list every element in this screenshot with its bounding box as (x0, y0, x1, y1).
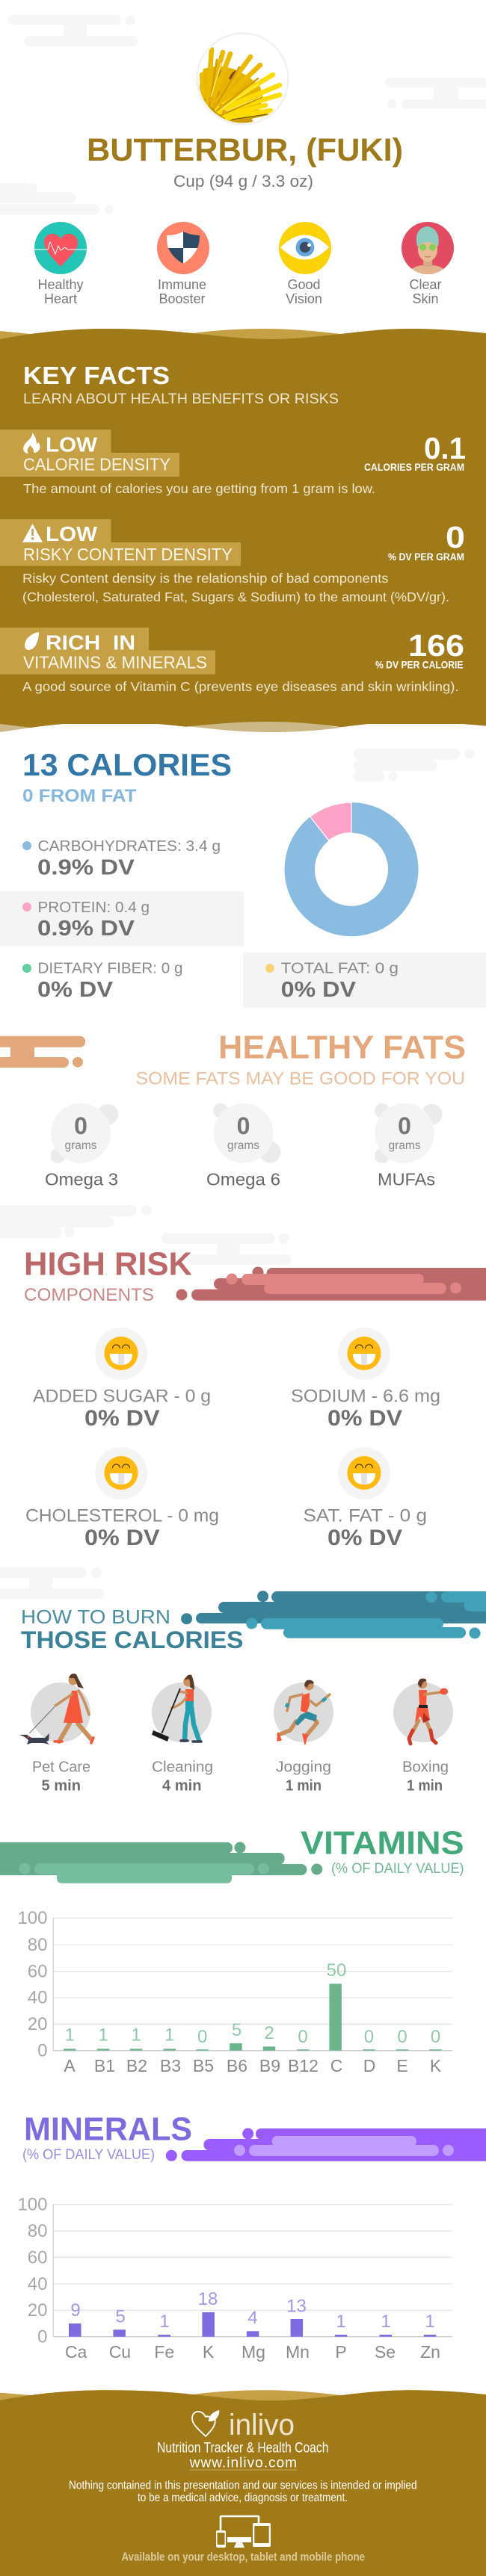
bar chart: vitamins: B1 (94, 2056, 115, 2075)
bar chart: vitamins: 0 (397, 2027, 407, 2047)
bar chart: minerals: 4 (247, 2308, 258, 2328)
label: good vision: Good (287, 277, 321, 292)
nutrient: total fat: 0% DV (281, 978, 357, 1002)
nutrient: total fat (243, 953, 486, 1008)
nutrient: total fat: TOTAL FAT: 0 g (281, 961, 399, 977)
item: saturated fat: SAT. FAT - 0 g (304, 1506, 427, 1526)
fat: mufas: 0 (398, 1112, 411, 1139)
label: jogging: 1 min (286, 1778, 322, 1795)
label: pet care: Pet Care (32, 1759, 90, 1776)
heading: key facts: KEY FACTS (23, 362, 170, 390)
bar chart: vitamins: 1 (164, 2025, 174, 2046)
label: cleaning: 4 min (162, 1778, 202, 1795)
nutrient: carbohydrates (22, 838, 221, 880)
fat: omega 3: grams (64, 1139, 97, 1152)
bar chart: vitamins: 20 (28, 2014, 48, 2034)
icon: healthy heart (34, 222, 87, 274)
rating: rich in: RICH IN (46, 631, 135, 654)
decorative banner: red cloud (176, 1267, 486, 1301)
panel: minerals (17, 2111, 486, 2362)
description line 1: Risky Content density is the relationship of bad components (22, 571, 389, 586)
bar chart: minerals: 1 (381, 2312, 391, 2332)
bar chart: vitamins: 80 (28, 1935, 48, 1955)
item: sodium: SODIUM - 6.6 mg (291, 1387, 440, 1407)
fact: rich in vitamins and minerals (0, 628, 464, 694)
label: cleaning: Cleaning (152, 1759, 213, 1776)
bar chart: minerals: 1 (159, 2312, 170, 2332)
label: pet care: 5 min (42, 1778, 81, 1795)
bar chart: vitamins: 0 (197, 2027, 207, 2047)
bar chart: vitamins: 0 (37, 2041, 48, 2061)
bar chart: vitamins: A (64, 2056, 76, 2075)
panel: health benefits icons (34, 222, 454, 306)
bar chart: vitamins: B5 (193, 2056, 214, 2075)
bar chart: vitamins: 1 (131, 2025, 141, 2046)
bar chart: minerals: Se (375, 2342, 396, 2362)
bar chart: minerals: 0 (37, 2327, 48, 2347)
label: pet care (32, 1759, 90, 1795)
bar chart: minerals: 100 (17, 2194, 48, 2214)
item: added sugar: ADDED SUGAR - 0 g (33, 1387, 211, 1407)
label: calorie density: CALORIE DENSITY (23, 454, 170, 474)
activity: pet care (19, 1674, 93, 1744)
description line 2: (Cholesterol, Saturated Fat, Sugars & Sodium) to the amount (%DV/gr). (22, 589, 449, 604)
bar chart: vitamins: 0 (431, 2027, 440, 2047)
fat: omega 6 (206, 1103, 281, 1189)
decorative banner: purple cloud (166, 2128, 486, 2161)
bar chart: minerals: 80 (28, 2221, 48, 2241)
unit: CALORIES PER GRAM (364, 462, 464, 473)
label: boxing (402, 1759, 449, 1795)
nutrient: carbohydrates: 0.9% DV (37, 856, 135, 880)
unit: % DV PER GRAM (388, 551, 464, 563)
label: risky content density: RISKY CONTENT DENSITY (23, 545, 233, 564)
fat: omega 6: Omega 6 (206, 1170, 280, 1189)
heading: minerals: MINERALS (24, 2111, 192, 2147)
nutrient: protein: PROTEIN: 0.4 g (37, 900, 150, 916)
item: cholesterol (25, 1447, 219, 1550)
heading: calories: 13 CALORIES (22, 747, 232, 782)
icon: devices (216, 2516, 271, 2548)
label: vitamins and minerals: VITAMINS & MINERALS (23, 653, 207, 672)
activity: boxing (393, 1679, 453, 1744)
fat: mufas: MUFAs (378, 1170, 435, 1189)
value: 0: 0 (446, 520, 465, 554)
nutrient: dietary fiber: DIETARY FIBER: 0 g (37, 961, 182, 977)
fat: omega 3 (45, 1103, 118, 1189)
label: good vision: Vision (286, 291, 322, 306)
subheading: from fat: 0 FROM FAT (22, 786, 137, 806)
disclaimer line 1: Nothing contained in this presentation and our services is intended or implied (69, 2480, 417, 2492)
bar chart: minerals: 9 (70, 2300, 81, 2320)
bar chart: minerals: 18 (198, 2289, 218, 2309)
panel: how to burn those calories (19, 1591, 486, 1795)
logo: inlivo (192, 2409, 295, 2442)
bar chart: vitamins: 100 (17, 1908, 48, 1928)
bar chart: minerals: Mn (286, 2342, 310, 2362)
website link: www.inlivo.com (189, 2456, 297, 2471)
fat: mufas (375, 1103, 443, 1189)
bar chart: vitamins: E (396, 2056, 408, 2075)
fat: omega 6: grams (227, 1139, 259, 1152)
bar chart: vitamins (17, 1908, 452, 2075)
bar chart: vitamins: B3 (160, 2056, 181, 2075)
heading line 1: HOW TO BURN (21, 1606, 170, 1628)
bar chart: vitamins: 5 (232, 2020, 242, 2040)
decorative banner: teal cloud (181, 1591, 486, 1639)
nutrient: protein: 0.9% DV (37, 917, 135, 941)
label: boxing: 1 min (407, 1778, 443, 1795)
description: The amount of calories you are getting from 1 gram is low. (23, 481, 375, 496)
bar chart: vitamins: 0 (298, 2027, 308, 2047)
label: cleaning (152, 1759, 213, 1795)
description: A good source of Vitamin C (prevents eye diseases and skin wrinkling). (22, 679, 459, 694)
activity: jogging (274, 1680, 333, 1744)
bar chart: vitamins: B12 (288, 2056, 319, 2075)
bar chart: vitamins: B2 (126, 2056, 147, 2075)
value: 0.1: 0.1 (424, 431, 466, 465)
bar chart: minerals: Ca (65, 2342, 87, 2362)
bar chart: minerals: K (203, 2342, 215, 2362)
fat: mufas: grams (388, 1139, 421, 1152)
label: jogging: Jogging (276, 1759, 331, 1776)
bar chart: minerals: 5 (115, 2306, 126, 2326)
decorative banner: orange cloud (0, 1036, 85, 1068)
bar chart: vitamins: B9 (259, 2056, 280, 2075)
rating: low: LOW (46, 522, 98, 545)
item: added sugar (33, 1328, 211, 1431)
bar chart: minerals: Zn (420, 2342, 440, 2362)
icon: clear skin (402, 222, 454, 274)
subheading: SOME FATS MAY BE GOOD FOR YOU (136, 1069, 465, 1089)
label: healthy heart: Healthy (37, 277, 84, 292)
fact: risky content density (0, 519, 465, 604)
bar chart: vitamins: C (330, 2056, 342, 2075)
nutrient: dietary fiber (22, 961, 182, 1002)
nutrient: carbohydrates: CARBOHYDRATES: 3.4 g (37, 838, 221, 855)
bar chart: vitamins: 1 (98, 2025, 108, 2046)
logo: inlivo: inlivo (229, 2409, 295, 2442)
subheading: LEARN ABOUT HEALTH BENEFITS OR RISKS (23, 391, 339, 407)
fat: omega 6: 0 (237, 1112, 250, 1139)
bar chart: vitamins: 50 (327, 1960, 346, 1981)
bar chart: vitamins: 40 (28, 1988, 48, 2008)
icon: good vision eye (279, 222, 331, 274)
label: jogging (276, 1759, 331, 1795)
item: sodium: 0% DV (327, 1406, 402, 1431)
icon: immune booster shield (157, 222, 209, 274)
tagline: Nutrition Tracker & Health Coach (157, 2441, 329, 2456)
icon: leaf (25, 632, 39, 650)
label: immune booster: Booster (159, 291, 206, 306)
heading line 2: THOSE CALORIES (21, 1626, 244, 1653)
bar chart: minerals: 1 (425, 2312, 435, 2332)
item: added sugar: 0% DV (84, 1406, 160, 1431)
panel: footer (0, 2390, 486, 2576)
bar chart: vitamins: 1 (65, 2025, 75, 2046)
bar chart: minerals: 13 (286, 2296, 307, 2316)
item: saturated fat: 0% DV (327, 1526, 402, 1550)
label: immune booster: Immune (158, 277, 206, 292)
icon: flame (23, 433, 40, 453)
label: clear skin: Clear (409, 277, 442, 292)
item: cholesterol: CHOLESTEROL - 0 mg (25, 1506, 219, 1526)
unit: % DV PER CALORIE (375, 659, 464, 671)
fat: omega 3: Omega 3 (45, 1170, 118, 1189)
bar chart: minerals: 1 (336, 2312, 346, 2332)
panel: calories (0, 747, 486, 1008)
label: clear skin: Skin (412, 291, 439, 306)
rating: low: LOW (46, 433, 98, 456)
donut chart (285, 802, 419, 936)
bar chart: minerals: P (335, 2342, 347, 2362)
fact: calorie density (0, 430, 466, 496)
label: healthy heart: Heart (44, 291, 77, 306)
bar chart: minerals (17, 2194, 452, 2362)
bar chart: minerals: Cu (109, 2342, 131, 2362)
subheading: (% OF DAILY VALUE) (22, 2146, 155, 2163)
bar chart: minerals: Fe (154, 2342, 174, 2362)
title: BUTTERBUR, (FUKI) (87, 132, 403, 168)
panel: vitamins (0, 1825, 464, 2075)
value: 166: 166 (408, 628, 464, 663)
bar chart: minerals: 20 (28, 2300, 48, 2320)
heading: high risk: HIGH RISK (24, 1246, 192, 1283)
bar chart: minerals: 60 (28, 2247, 48, 2267)
availability note: Available on your desktop, tablet and mobile phone (121, 2551, 365, 2564)
bar chart: minerals: Mg (242, 2342, 265, 2362)
heading: healthy fats: HEALTHY FATS (218, 1030, 466, 1066)
heading: vitamins: VITAMINS (301, 1825, 464, 1862)
item: sodium (291, 1328, 440, 1431)
subheading: (% OF DAILY VALUE) (331, 1860, 464, 1877)
nutrient: protein (0, 891, 244, 947)
activity: cleaning (152, 1675, 212, 1742)
bar chart: vitamins: B6 (227, 2056, 247, 2075)
icon: warning triangle (22, 524, 43, 542)
label: boxing: Boxing (402, 1759, 449, 1776)
bar chart: minerals: 40 (28, 2274, 48, 2294)
bar chart: vitamins: 2 (264, 2023, 274, 2043)
panel: key facts (0, 329, 486, 732)
icon: butterbur flower photo (197, 33, 289, 126)
item: cholesterol: 0% DV (84, 1526, 160, 1550)
bar chart: vitamins: 60 (28, 1962, 48, 1982)
disclaimer line 2: to be a medical advice, diagnosis or treatment. (138, 2492, 348, 2504)
subheading: components: COMPONENTS (24, 1285, 154, 1305)
serving size subtitle: Cup (94 g / 3.3 oz) (173, 172, 313, 191)
bar chart: vitamins: 0 (364, 2027, 374, 2047)
panel: high risk components (24, 1246, 486, 1550)
fat: omega 3: 0 (74, 1112, 87, 1139)
nutrient: dietary fiber: 0% DV (37, 978, 114, 1002)
bar chart: vitamins: K (430, 2056, 442, 2075)
panel: healthy fats (0, 1030, 466, 1189)
decorative banner: green cloud (0, 1842, 322, 1883)
bar chart: vitamins: D (363, 2056, 375, 2075)
item: saturated fat (304, 1447, 427, 1550)
